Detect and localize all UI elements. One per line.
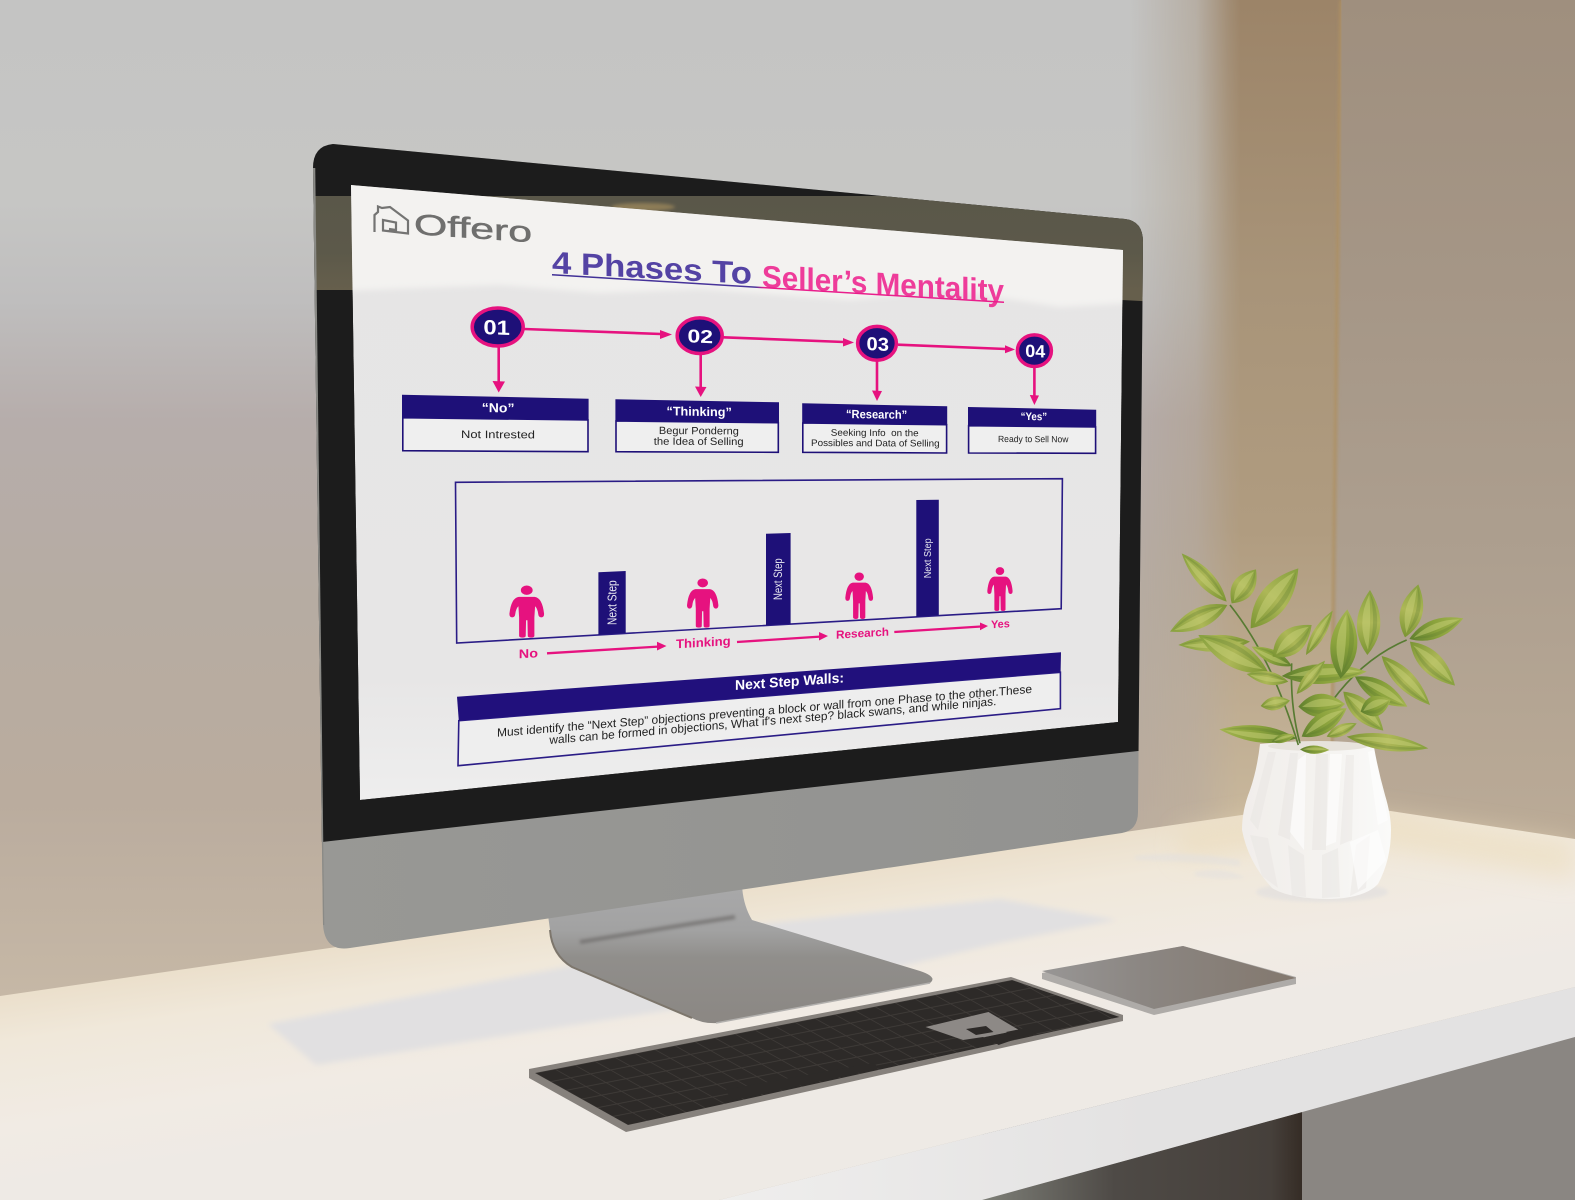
chart: next step walls — [456, 479, 1062, 643]
desk — [0, 802, 1575, 1200]
title — [552, 245, 1005, 309]
phase badge 03 — [858, 326, 896, 360]
wall 3 — [916, 500, 939, 617]
person Research — [845, 572, 873, 619]
person Yes — [987, 567, 1013, 611]
panel: Research — [802, 403, 947, 453]
chart axis labels and arrows: Research — [836, 627, 889, 642]
panel: Yes: Ready to Sell Now — [998, 434, 1069, 444]
wall 3: Next Step — [922, 538, 934, 578]
panel: No — [402, 395, 589, 452]
plant — [1166, 548, 1467, 756]
person No — [509, 585, 544, 638]
phase badge 02 — [677, 318, 722, 354]
icon: house — [374, 206, 408, 234]
monitor body — [300, 130, 1160, 960]
chart axis labels and arrows: Yes — [991, 618, 1010, 631]
plant stems — [1230, 605, 1407, 745]
panel: Research: Possibles and Data of Selling — [811, 438, 940, 450]
chart axis labels and arrows — [519, 618, 1010, 661]
panel: Thinking: “Thinking” — [666, 404, 732, 419]
phase badge 01 — [472, 308, 523, 346]
panel: Thinking — [615, 399, 779, 452]
phase badge 01: 01 — [483, 316, 510, 340]
monitor shadow on desk — [268, 899, 1117, 1065]
chart axis labels and arrows: No — [519, 646, 538, 661]
wall 2: Next Step — [773, 558, 785, 600]
keyboard — [529, 977, 1123, 1132]
wall 2 — [766, 533, 791, 625]
panel: Thinking: Begur Ponderng — [659, 425, 739, 437]
logo: Offero — [374, 206, 532, 249]
monitor stand — [548, 885, 932, 1023]
chart frame — [456, 479, 1062, 643]
wall 1: Next Step — [606, 580, 620, 625]
phase badge 04 — [1017, 335, 1051, 367]
chart axis labels and arrows: Thinking — [676, 634, 731, 651]
title: Seller’s Mentality — [762, 259, 1005, 309]
panel: Research: Seeking Info on the — [831, 428, 919, 439]
trackpad — [1042, 946, 1296, 1015]
pot shadow — [1135, 854, 1388, 902]
title: 4 Phases To — [552, 245, 752, 291]
phase badge 03: 03 — [866, 333, 889, 355]
phase badge 02: 02 — [688, 325, 713, 347]
panel: Yes — [968, 407, 1096, 453]
panel: Next Step Walls: Next Step Walls: — [735, 669, 844, 693]
panel: No: Not Intrested — [461, 429, 535, 441]
logo wordmark: Offero — [414, 209, 532, 249]
phase badge 04: 04 — [1025, 341, 1045, 362]
panel: Next Step Walls: walls can be formed in objections, What if's next step? black swans, and while ninjas. — [548, 694, 996, 747]
person Thinking — [687, 578, 718, 628]
panel: Next Step Walls — [457, 652, 1061, 766]
panel: No: “No” — [482, 400, 514, 416]
wall 1 — [598, 571, 626, 635]
phase flow arrows — [492, 329, 1039, 405]
vase — [1242, 741, 1391, 899]
panel: Research: “Research” — [846, 407, 907, 422]
screen — [340, 175, 1130, 800]
panel: Yes: “Yes” — [1021, 411, 1047, 423]
leaves — [1166, 548, 1467, 756]
panel: Next Step Walls: Must identify the “Next Step” objections preventing a block or wall from one Phase to the other.These — [497, 682, 1032, 740]
panel: Thinking: the Idea of Selling — [654, 436, 744, 448]
